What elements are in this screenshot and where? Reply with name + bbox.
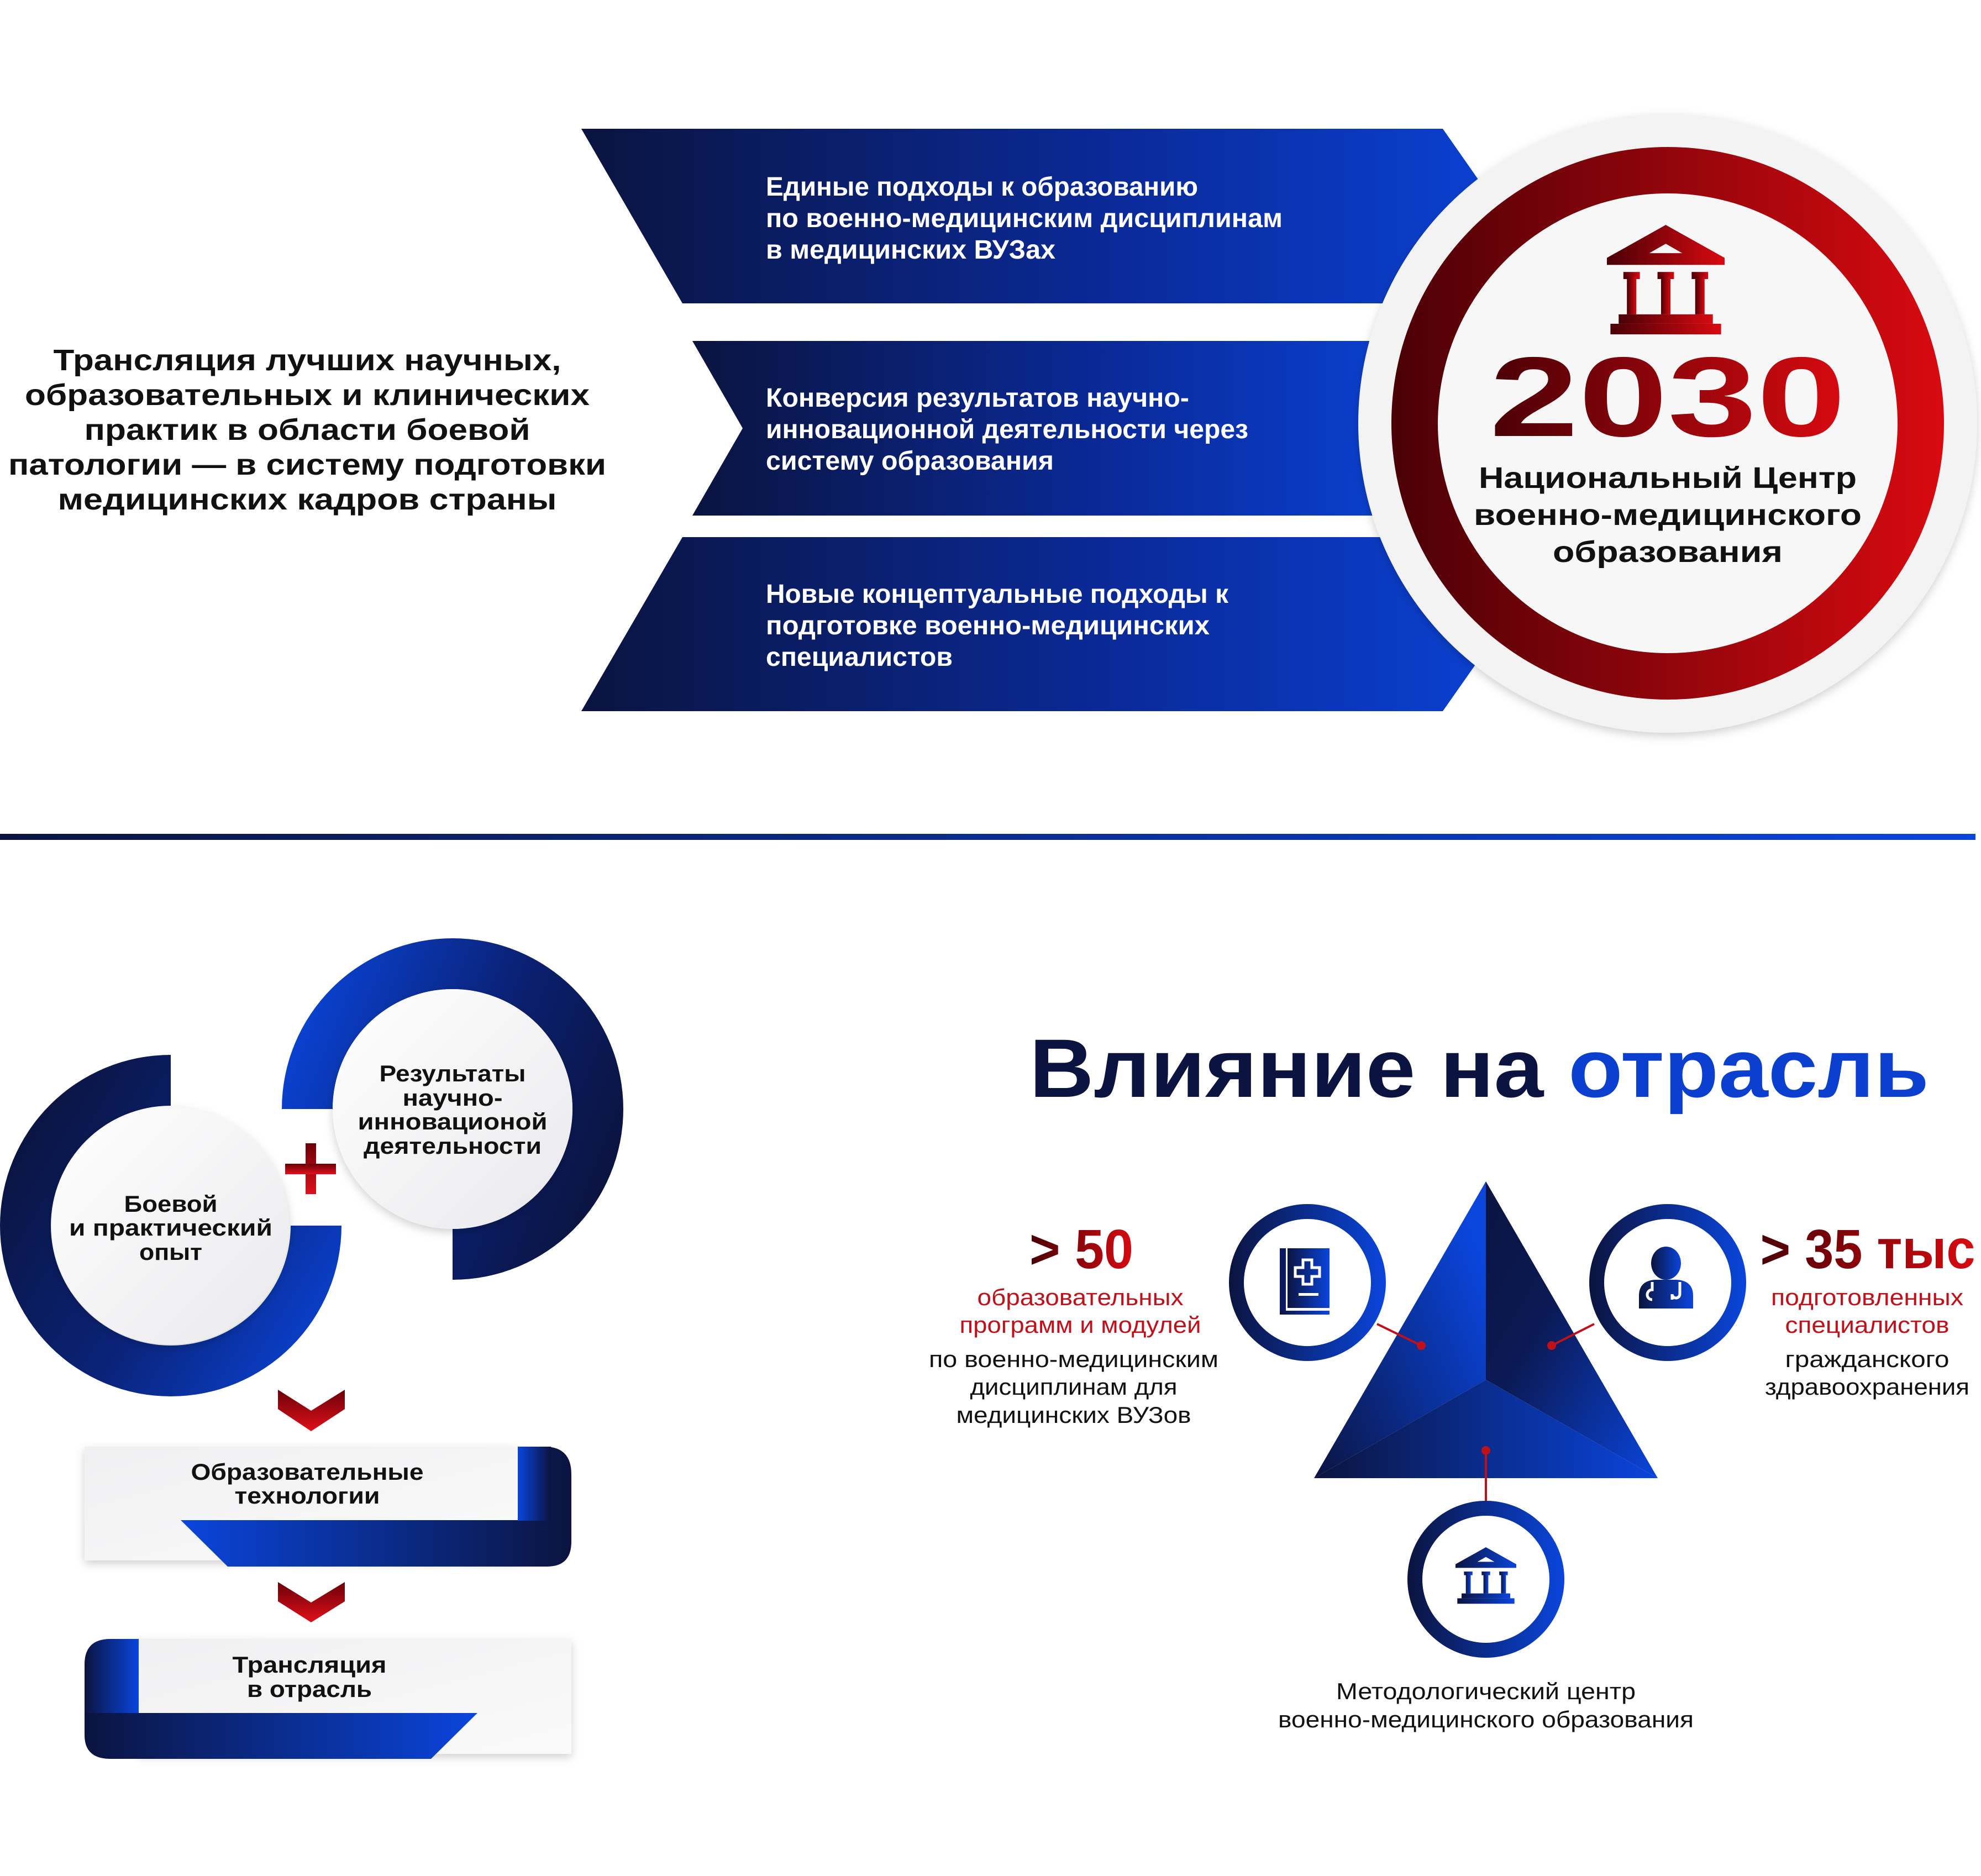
stat: more than 50 programs: дисциплинам для [970,1374,1177,1400]
box: translation to industry: Трансляция [232,1652,387,1678]
box: translation to industry: в отрасль [247,1676,372,1702]
band 1: unified approaches: в медицинских ВУЗах [766,235,1055,265]
left heading: translation of best practices: Трансляция лучших научных, [53,344,561,377]
arrow: chevron down 1 [278,1390,345,1431]
badge caption [1474,461,1862,569]
stat: more than 50 programs [929,1218,1218,1428]
stat: more than 50 programs: > 50 [1029,1218,1133,1280]
band 1: unified approaches [581,129,1565,303]
diagram: research results circle [282,938,623,1280]
chart: pyramid [1314,1181,1658,1478]
caption: methodological center [1278,1678,1694,1732]
band 3: new conceptual approaches [581,537,1565,711]
icon: red plus [285,1143,336,1194]
band 2: conversion of research results: Конверсия результатов научно- [766,383,1189,413]
badge caption: Национальный Центр [1479,461,1857,495]
diagram: research results circle: научно- [402,1085,503,1111]
diagram: combat experience circle: и практический [69,1215,272,1241]
box: educational technologies: Образовательные [191,1459,423,1485]
diagram: combat experience circle: опыт [139,1239,202,1265]
band 2: conversion of research results: систему образования [766,446,1054,476]
stat: more than 35 thousand specialists: специалистов [1785,1312,1950,1338]
diagram: combat experience circle [0,1055,341,1396]
left heading: translation of best practices: образовательных и клинических [25,379,590,412]
diagram: research results circle: инновационой [358,1108,547,1134]
band 3: new conceptual approaches: специалистов [766,643,953,672]
left heading: translation of best practices: патологии — в систему подготовки [8,448,606,481]
diagram: research results circle: деятельности [364,1133,542,1159]
stat: more than 35 thousand specialists: гражданского [1785,1346,1950,1372]
badge: 2030 national center [1358,114,1977,733]
title: impact on industry: Влияние на отрасль [1029,1022,1929,1115]
stat: more than 50 programs: по военно-медицинским [929,1346,1218,1372]
year 2030: 2030 [1490,334,1846,460]
icon circle: methodological center building [1407,1501,1564,1658]
band 3: new conceptual approaches: подготовке военно-медицинских [766,611,1210,640]
stat: more than 35 thousand specialists: здравоохранения [1765,1374,1969,1400]
icon circle: book [1229,1204,1386,1361]
left heading: translation of best practices: практик в области боевой [84,413,530,446]
diagram: combat experience circle: Боевой [124,1191,218,1217]
connectors: red lines with dots [1377,1324,1594,1501]
badge caption: военно-медицинского [1474,498,1862,532]
badge caption: образования [1553,535,1783,569]
caption: methodological center: военно-медицинского образования [1278,1706,1694,1732]
icon: red building [1607,225,1725,334]
caption: methodological center: Методологический центр [1336,1678,1636,1704]
stat: more than 50 programs: медицинских ВУЗов [956,1402,1191,1428]
band 2: conversion of research results [692,341,1459,516]
box: educational technologies: технологии [234,1483,380,1509]
stat: more than 50 programs: программ и модулей [959,1312,1201,1338]
stat: more than 50 programs: образовательных [977,1284,1184,1310]
box: educational technologies [85,1447,571,1567]
band 1: unified approaches: по военно-медицинским дисциплинам [766,204,1283,233]
box: translation to industry [85,1639,571,1759]
band 3: new conceptual approaches: Новые концептуальные подходы к [766,580,1229,609]
stat: more than 35 thousand specialists: подготовленных [1771,1284,1963,1310]
left heading: translation of best practices: медицинских кадров страны [57,483,557,516]
icon circle: doctor [1589,1204,1746,1361]
left heading: translation of best practices [8,344,606,516]
stat: more than 35 thousand specialists [1761,1218,1975,1400]
arrow: chevron down 2 [278,1582,345,1622]
band 1: unified approaches: Единые подходы к образованию [766,172,1198,202]
band 2: conversion of research results: инновационной деятельности через [766,415,1248,444]
diagram: research results circle: Результаты [379,1060,526,1086]
